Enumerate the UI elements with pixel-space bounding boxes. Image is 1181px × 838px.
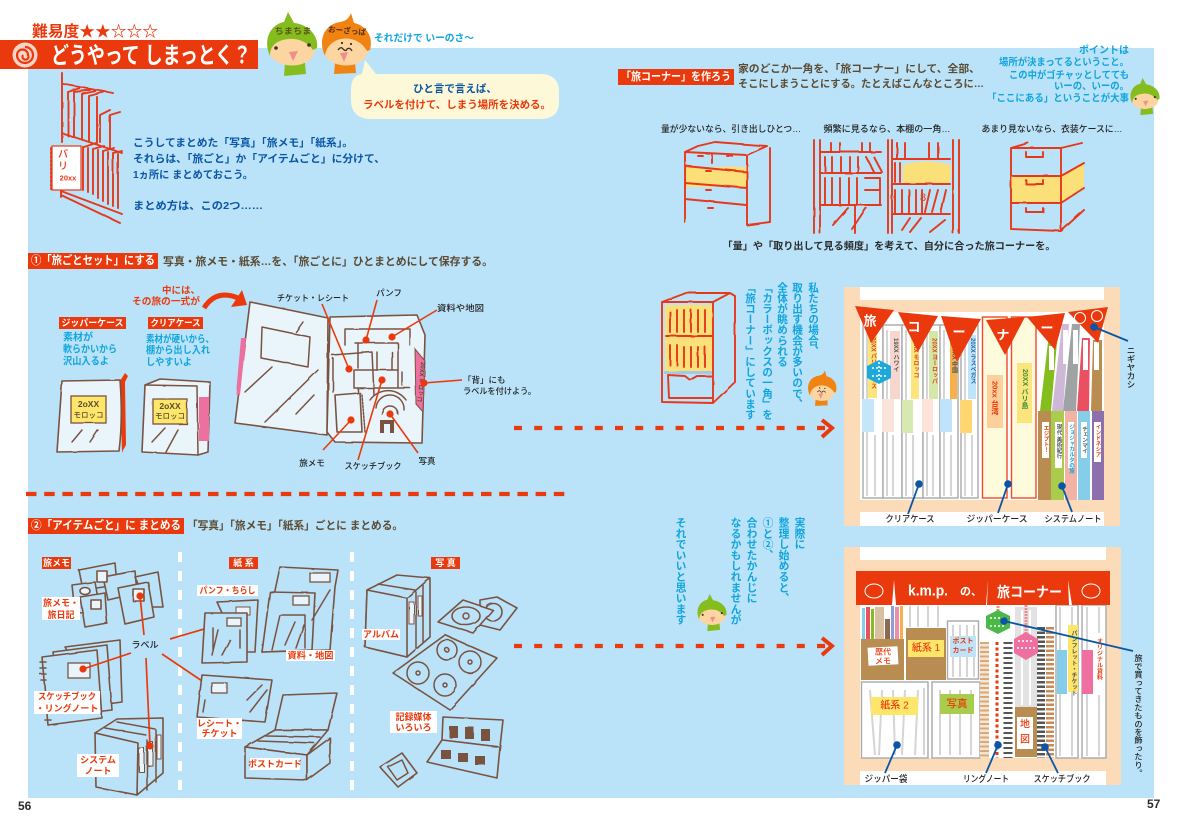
red banner — [856, 571, 1110, 605]
callouts: クリアケース — [886, 514, 934, 524]
storage idea: clothes case — [982, 123, 1122, 231]
ring notebooks — [34, 640, 122, 725]
icon: blue hexagon ornament — [867, 360, 891, 384]
bunting: ナ — [996, 328, 1010, 342]
storage idea: drawer chest: 量が少ないなら、引き出しひとつ… — [661, 123, 801, 134]
bunting: コ — [907, 320, 921, 334]
zipper case: 沢山入るよ — [63, 354, 109, 368]
zipper cases — [982, 317, 1036, 498]
clear case: しやすいよ — [146, 356, 192, 368]
system notes: エジプト！ — [1042, 425, 1049, 453]
clear case: モロッコ — [155, 412, 185, 420]
speech bubble — [351, 60, 559, 119]
zipper case: 素材が — [63, 330, 93, 344]
color box sketch — [662, 293, 735, 403]
vertical note 2: それでいいと思います — [674, 517, 686, 625]
character small green top — [1131, 78, 1160, 115]
title banner — [0, 40, 258, 69]
vertical note 1: 私たちの場合、 — [807, 281, 819, 356]
heading: method 2 — [28, 518, 403, 534]
clear cases: 20XX モロッコ — [912, 338, 919, 379]
title banner: どうやって しまっとく？ — [51, 42, 251, 68]
bunting: 旅 — [863, 314, 877, 328]
pencils and memo box: ポスト — [952, 637, 974, 645]
heading: travel corner: 家のどこか一角を、「旅コーナー」にして、全部、 — [738, 62, 980, 75]
point note: 「ここにある」ということが大事 — [987, 92, 1129, 104]
character quip: それだけで いーのさ～ — [374, 32, 474, 44]
intro text: それらは、「旅ごと」か「アイテムごと」に分けて、 — [133, 152, 385, 165]
heading: travel corner: そこにしまうことにする。たとえばこんなところに… — [738, 77, 984, 90]
red banner: k.m.p. — [908, 582, 948, 600]
vertical note 1: 「旅コーナー」にしています — [744, 282, 756, 420]
notebook cover text: パ — [58, 148, 68, 160]
vertical note 2 — [674, 516, 805, 625]
heading: method 1: ①「旅ごとセット」にする — [31, 253, 155, 267]
ring notebooks: スケッチブック — [38, 690, 96, 702]
label callout lines: ラベル — [131, 640, 159, 650]
ring notebooks: ・リングノート — [36, 702, 98, 714]
clear cases: 20XX ラスベガス — [969, 338, 976, 385]
zipper case: 2oXX — [78, 399, 99, 409]
ring notes and sketchbooks: 図 — [1020, 734, 1030, 746]
callouts: ジッパー袋 — [864, 773, 908, 784]
bunting — [855, 306, 1108, 362]
system notes: 現代 美術紀行 — [1056, 424, 1062, 460]
system notes: インドネシア — [1094, 424, 1101, 457]
callout: contents arrow — [132, 284, 247, 308]
category: paper items — [197, 557, 338, 780]
label callout lines — [79, 592, 232, 750]
notebook cover text — [58, 148, 77, 182]
system notes — [1038, 324, 1104, 500]
point note: この中がゴチャッとしてても — [1009, 68, 1129, 82]
binder diagram: パンフ — [376, 288, 402, 298]
category: travel memos — [42, 557, 163, 627]
pencils and memo box: 歴代 — [875, 646, 891, 656]
callouts: リングノート — [963, 773, 1009, 784]
heading: travel corner — [618, 62, 984, 90]
vertical note 2: ①と②、 — [761, 517, 773, 560]
clear case: クリアケース — [150, 318, 200, 328]
zipper cases: 20XX バリ島 — [1021, 369, 1028, 410]
binder diagram: 資料や地図 — [437, 303, 484, 313]
pencils and memo box: 紙系 1 — [912, 641, 941, 654]
bunting: ー — [1040, 320, 1054, 336]
right clear files: パンフレット・チケット — [1070, 630, 1077, 696]
storage idea: drawer chest — [661, 123, 801, 225]
category: travel memos: 旅日記 — [47, 609, 75, 620]
category: photos — [362, 557, 517, 787]
category: photos: アルバム — [363, 630, 399, 640]
ring notes and sketchbooks: 地 — [1020, 718, 1030, 730]
vertical note 2: 整理し始めると、 — [777, 516, 789, 603]
binder diagram: 旅メモ — [299, 458, 325, 468]
vertical note 1: 取り出す機会が多いので、 — [791, 282, 803, 409]
clear case: 2oXX — [159, 401, 181, 411]
callouts — [886, 323, 1136, 524]
vertical note 1 — [744, 281, 819, 420]
character: chimachima (green) — [267, 12, 317, 76]
binder diagram: 写真 — [418, 456, 436, 466]
difficulty rating: 難易度★★☆☆☆ — [32, 22, 158, 40]
clear cases — [862, 325, 978, 498]
system notes: システム — [80, 755, 116, 765]
storage idea: bookshelf — [814, 123, 959, 233]
intro text: まとめ方は、この2つ…… — [133, 199, 263, 212]
clear case — [142, 317, 214, 455]
character: ozassa (orange): おーざっぱ — [328, 24, 366, 37]
category: photos: 写 真 — [435, 557, 456, 568]
binder diagram: 「背」にも — [463, 375, 506, 385]
dashed arrow 1 — [514, 420, 832, 437]
bunting: ー — [952, 324, 966, 340]
right clear files — [1056, 605, 1106, 758]
callout: contents arrow: その旅の一式が — [132, 296, 200, 308]
vertical note 1: 「カラーボックスの一角」を — [761, 282, 773, 420]
pencils and memo box: メモ — [875, 656, 891, 666]
category: paper items: パンフ・ちらし — [200, 586, 256, 596]
intro text: 1ヵ所に まとめておこう。 — [133, 168, 253, 181]
speech bubble: ひと言で言えば、 — [413, 82, 497, 95]
storage idea: bookshelf: 8 — [920, 192, 926, 204]
character: chimachima (green): ちまちま — [274, 26, 312, 36]
heading: travel corner: 「旅コーナー」を作ろう — [621, 69, 731, 83]
system notes: チェンマイ — [1081, 426, 1088, 454]
category: photos: いろいろ — [395, 722, 432, 732]
notebook cover text: 20xx — [60, 174, 77, 182]
point note: ポイントは — [1079, 44, 1129, 56]
pencils and memo box: 写真 — [946, 697, 968, 710]
shelf panel: travel sets — [844, 287, 1136, 526]
category: paper items: チケット — [201, 728, 238, 738]
red banner: の、 — [960, 586, 982, 598]
binder diagram — [235, 288, 536, 471]
vertical note 2: 合わせたかんじに — [745, 516, 757, 603]
heading: method 2: 「写真」「旅メモ」「紙系」ごとに まとめる。 — [187, 518, 403, 532]
zipper case — [57, 317, 128, 452]
system notes: ジョジャカルタの旅 — [1068, 424, 1075, 475]
clear case: 棚から出し入れ — [146, 344, 210, 356]
point note: 場所が決まってるということ。 — [999, 56, 1129, 68]
category: paper items: 紙 系 — [233, 557, 254, 568]
category: paper items: レシート・ — [197, 718, 242, 728]
category: paper items: ポストカード — [248, 759, 302, 769]
page number 57: 57 — [1147, 797, 1161, 811]
binder diagram: チケット・レシート — [277, 293, 349, 303]
zipper case: ジッパーケース — [62, 318, 124, 328]
category: photos: 記録媒体 — [395, 711, 432, 722]
page number 56: 56 — [18, 799, 32, 813]
binder diagram: ラベルを付けよう。 — [463, 386, 536, 396]
zipper cases: 20xx 台湾 — [990, 381, 1000, 416]
ring notes and sketchbooks — [980, 607, 1050, 758]
callouts: システムノート — [1044, 514, 1102, 524]
intro text: こうしてまとめた「写真」「旅メモ」「紙系」。 — [133, 136, 353, 149]
category: travel memos: 旅メモ — [43, 557, 70, 568]
intro text — [133, 136, 385, 212]
speech bubble: ラベルを付けて、しまう場所を決める。 — [363, 98, 551, 111]
vertical note 2: 実際に — [793, 516, 805, 549]
point note: いーの、いーの。 — [1054, 82, 1129, 92]
callout: contents arrow: 中には、 — [162, 284, 200, 296]
binder diagram: 20XX モロッコ — [415, 362, 426, 403]
pencils and memo box — [861, 606, 980, 758]
vertical note 2: なるかもしれませんが — [729, 517, 741, 625]
red banner: 旅コーナー — [997, 584, 1062, 600]
storage conclusion: 「量」や「取り出して見る頻度」を考えて、自分に合った旅コーナーを。 — [722, 240, 1056, 252]
character small orange — [808, 371, 836, 406]
sketch: bookshelf with notebook — [51, 73, 122, 223]
character: ozassa (orange) — [322, 13, 371, 74]
notebook cover text: リ — [58, 162, 68, 172]
character small green — [698, 594, 727, 631]
callouts: ジッパーケース — [966, 514, 1028, 524]
callouts — [864, 617, 1143, 784]
clear case: 素材が硬いから、 — [146, 332, 214, 346]
zipper case: 軟らかいから — [63, 342, 117, 356]
callouts: スケッチブック — [1034, 773, 1090, 784]
icon: hexagon ornaments — [986, 605, 1038, 660]
right clear files: オリジナル資料 — [1096, 638, 1102, 681]
clear cases: 19XX ハワイ — [892, 338, 899, 372]
vertical note 1: 全体が眺められる — [776, 281, 788, 367]
point note — [987, 44, 1129, 104]
heading: method 1: 写真・旅メモ・紙系…を、「旅ごとに」ひとまとめにして保存する。 — [163, 254, 493, 268]
storage idea: clothes case: あまり見ないなら、衣装ケースに… — [982, 123, 1122, 134]
callouts: ニギヤカシ — [1126, 346, 1136, 388]
zipper case: モロッコ — [74, 410, 104, 420]
clear cases: 20XX ヨーロッパ — [930, 338, 938, 385]
heading: method 2: ②「アイテムごと」に まとめる — [31, 518, 181, 532]
shelf panel: k.m.p. corner — [844, 547, 1143, 785]
category: travel memos: 旅メモ・ — [43, 597, 79, 608]
binder diagram: スケッチブック — [344, 461, 402, 471]
heading: method 1 — [28, 253, 493, 269]
callouts: 旅で買ってきたものを飾ったり。 — [1134, 653, 1143, 777]
pencils and memo box: カード — [952, 646, 974, 654]
category: paper items: 資料・地図 — [288, 650, 334, 660]
pencils and memo box: 紙系 2 — [880, 698, 909, 712]
clear cases: 20XX パリ・ニース — [870, 337, 876, 390]
dashed arrow 2 — [514, 638, 832, 655]
clear cases: 20XX 中国 — [950, 345, 958, 375]
system notes: ノート — [84, 766, 112, 776]
storage idea: bookshelf: 頻繁に見るなら、本棚の一角… — [824, 123, 950, 134]
system notes — [77, 718, 163, 795]
